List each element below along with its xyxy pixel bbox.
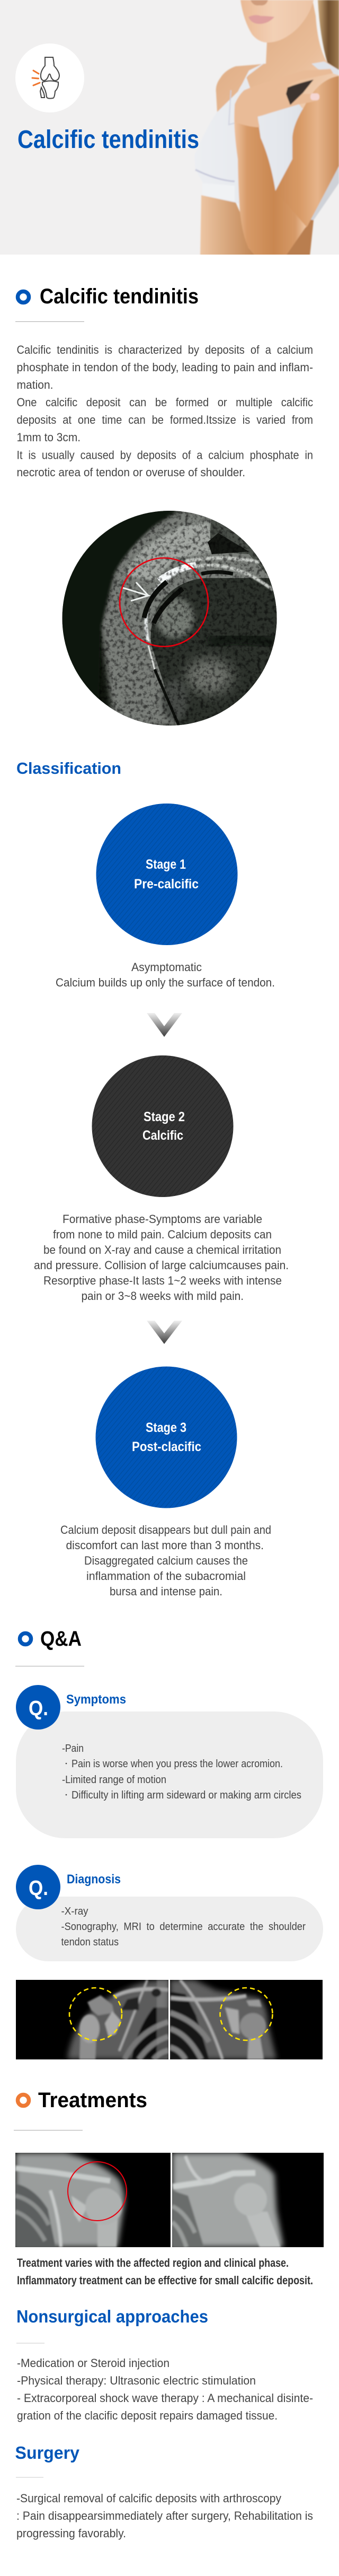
diagnosis list: -X-ray (61, 1906, 88, 1917)
x-ray: left shoulder (16, 1980, 168, 2059)
heading: Treatments: Treatments (38, 2089, 147, 2112)
stage 2 description: Formative phase-Symptoms are variable (63, 1212, 262, 1226)
x-ray: right shoulder (170, 1980, 323, 2059)
text block: nonsurgical list: - Extracorporeal shock wave therapy : A mechanical disinte- (17, 2391, 313, 2405)
stage 2 description: and pressure. Collision of large calciumcauses pain. (34, 1259, 289, 1272)
text block: definition: deposits at one time can be formed.Itssize is varied from (17, 413, 313, 426)
text block: nonsurgical list: gration of the clacific deposit repairs damaged tissue. (17, 2409, 278, 2422)
text block: definition: 1mm to 3cm. (17, 431, 81, 444)
callout: red circle and arrow on MRI (120, 558, 208, 647)
stage 2 description: from none to mild pain. Calcium deposits can (53, 1228, 272, 1241)
stage 3 description: Calcium deposit disappears but dull pain and (60, 1523, 271, 1536)
symptoms list (62, 1743, 301, 1801)
symptoms list: -Limited range of motion (62, 1774, 166, 1786)
stage 2 description: Resorptive phase-It lasts 1~2 weeks with intense (43, 1274, 282, 1287)
text block: definition: Calcific tendinitis is characterized by deposits of a calcium (17, 343, 313, 356)
stage 1: Stage 1 (146, 857, 186, 872)
heading: Q&A: Q&A (40, 1627, 82, 1651)
heading: Nonsurgical approaches: Nonsurgical approaches (16, 2307, 208, 2326)
icon: knee joint (15, 43, 84, 112)
symptoms list: Pain is worse when you press the lower acromion. (72, 1758, 283, 1770)
symptoms heading: Symptoms (66, 1692, 126, 1707)
heading: Surgery: Surgery (15, 2443, 80, 2463)
panel: diagnosis (16, 1865, 323, 1961)
text block: surgery list: progressing favorably. (16, 2527, 126, 2540)
stage 2: Calcific (142, 1128, 183, 1143)
callout: yellow dashed circles (69, 1988, 272, 2040)
stage 3 description: inflammation of the subacromial (86, 1569, 246, 1583)
text block: surgery list: -Surgical removal of calcific deposits with arthroscopy (16, 2492, 281, 2505)
text block: nonsurgical list: -Medication or Steroid injection (17, 2356, 170, 2370)
icon: Q badge (16, 1865, 60, 1909)
heading: Treatments (14, 2089, 147, 2130)
stage 2 description: be found on X-ray and cause a chemical irritation (43, 1243, 281, 1256)
text block: nonsurgical list: -Physical therapy: Ultrasonic electric stimulation (17, 2374, 256, 2387)
arrow: chevron to stage 3 (147, 1321, 182, 1344)
diagnosis list: -Sonography, MRI to determine accurate the shoulder (61, 1921, 306, 1933)
MRI image of shoulder (62, 510, 281, 726)
heading: Q&A (15, 1627, 84, 1666)
icon: Q badge: Q. (29, 1876, 48, 1900)
icon: Q badge (16, 1685, 60, 1730)
heading: Calcific tendinitis (15, 285, 199, 322)
stage 1 description (56, 960, 275, 989)
text block: surgery list: : Pain disappearsimmediately after surgery, Rehabilitation is (16, 2509, 313, 2522)
text block: definition: necrotic area of tendon or overuse of shoulder. (17, 466, 245, 479)
title: Calcific tendinitis (17, 126, 199, 154)
stage 1 description: Calcium builds up only the surface of tendon. (56, 976, 275, 989)
stage 2 description (34, 1212, 289, 1303)
stage 3 description: discomfort can last more than 3 months. (66, 1539, 264, 1552)
text block: nonsurgical list (17, 2356, 313, 2422)
hero banner (0, 0, 339, 256)
text block: definition: mation. (17, 378, 53, 391)
stage 3 description (60, 1523, 271, 1598)
diagnosis heading: Diagnosis (67, 1872, 121, 1887)
arrow: chevron to stage 2 (147, 1013, 182, 1037)
x-ray: before treatment (15, 2153, 171, 2247)
panel: symptoms (16, 1685, 323, 1838)
stage 3 (95, 1366, 237, 1508)
stage 3: Post-clacific (132, 1439, 201, 1454)
stage 3 description: bursa and intense pain. (110, 1585, 222, 1598)
stage 2 description: pain or 3~8 weeks with mild pain. (82, 1289, 244, 1303)
stage 3: Stage 3 (146, 1420, 186, 1435)
photo: woman holding shoulder (194, 0, 339, 256)
text block: treatment summary (17, 2256, 313, 2287)
heading: Classification: Classification (16, 759, 121, 778)
text block: surgery list (16, 2492, 313, 2540)
callout: red circle on x-ray (68, 2162, 127, 2221)
stage 1 description: Asymptomatic (131, 960, 202, 974)
symptoms list: -Pain (62, 1743, 84, 1754)
stage 1 (96, 804, 237, 945)
x-ray: after treatment (172, 2153, 324, 2247)
diagnosis list (61, 1906, 306, 1948)
stage 1: Pre-calcific (134, 877, 199, 892)
diagnosis list: tendon status (61, 1936, 119, 1948)
text block: definition: It is usually caused by deposits of a calcium phosphate in (17, 449, 313, 461)
text block: definition (17, 343, 313, 479)
text block: definition: phosphate in tendon of the body, leading to pain and inflam- (17, 361, 313, 374)
stage 2 (92, 1055, 233, 1197)
symptoms list: Difficulty in lifting arm sideward or making arm circles (72, 1789, 301, 1801)
icon: Q badge: Q. (29, 1697, 48, 1720)
stage 2: Stage 2 (144, 1110, 185, 1124)
heading: Calcific tendinitis: Calcific tendinitis (40, 285, 199, 308)
heading: Surgery (15, 2443, 80, 2478)
text block: definition: One calcific deposit can be formed or multiple calcific (17, 396, 313, 409)
stage 3 description: Disaggregated calcium causes the (84, 1554, 248, 1567)
